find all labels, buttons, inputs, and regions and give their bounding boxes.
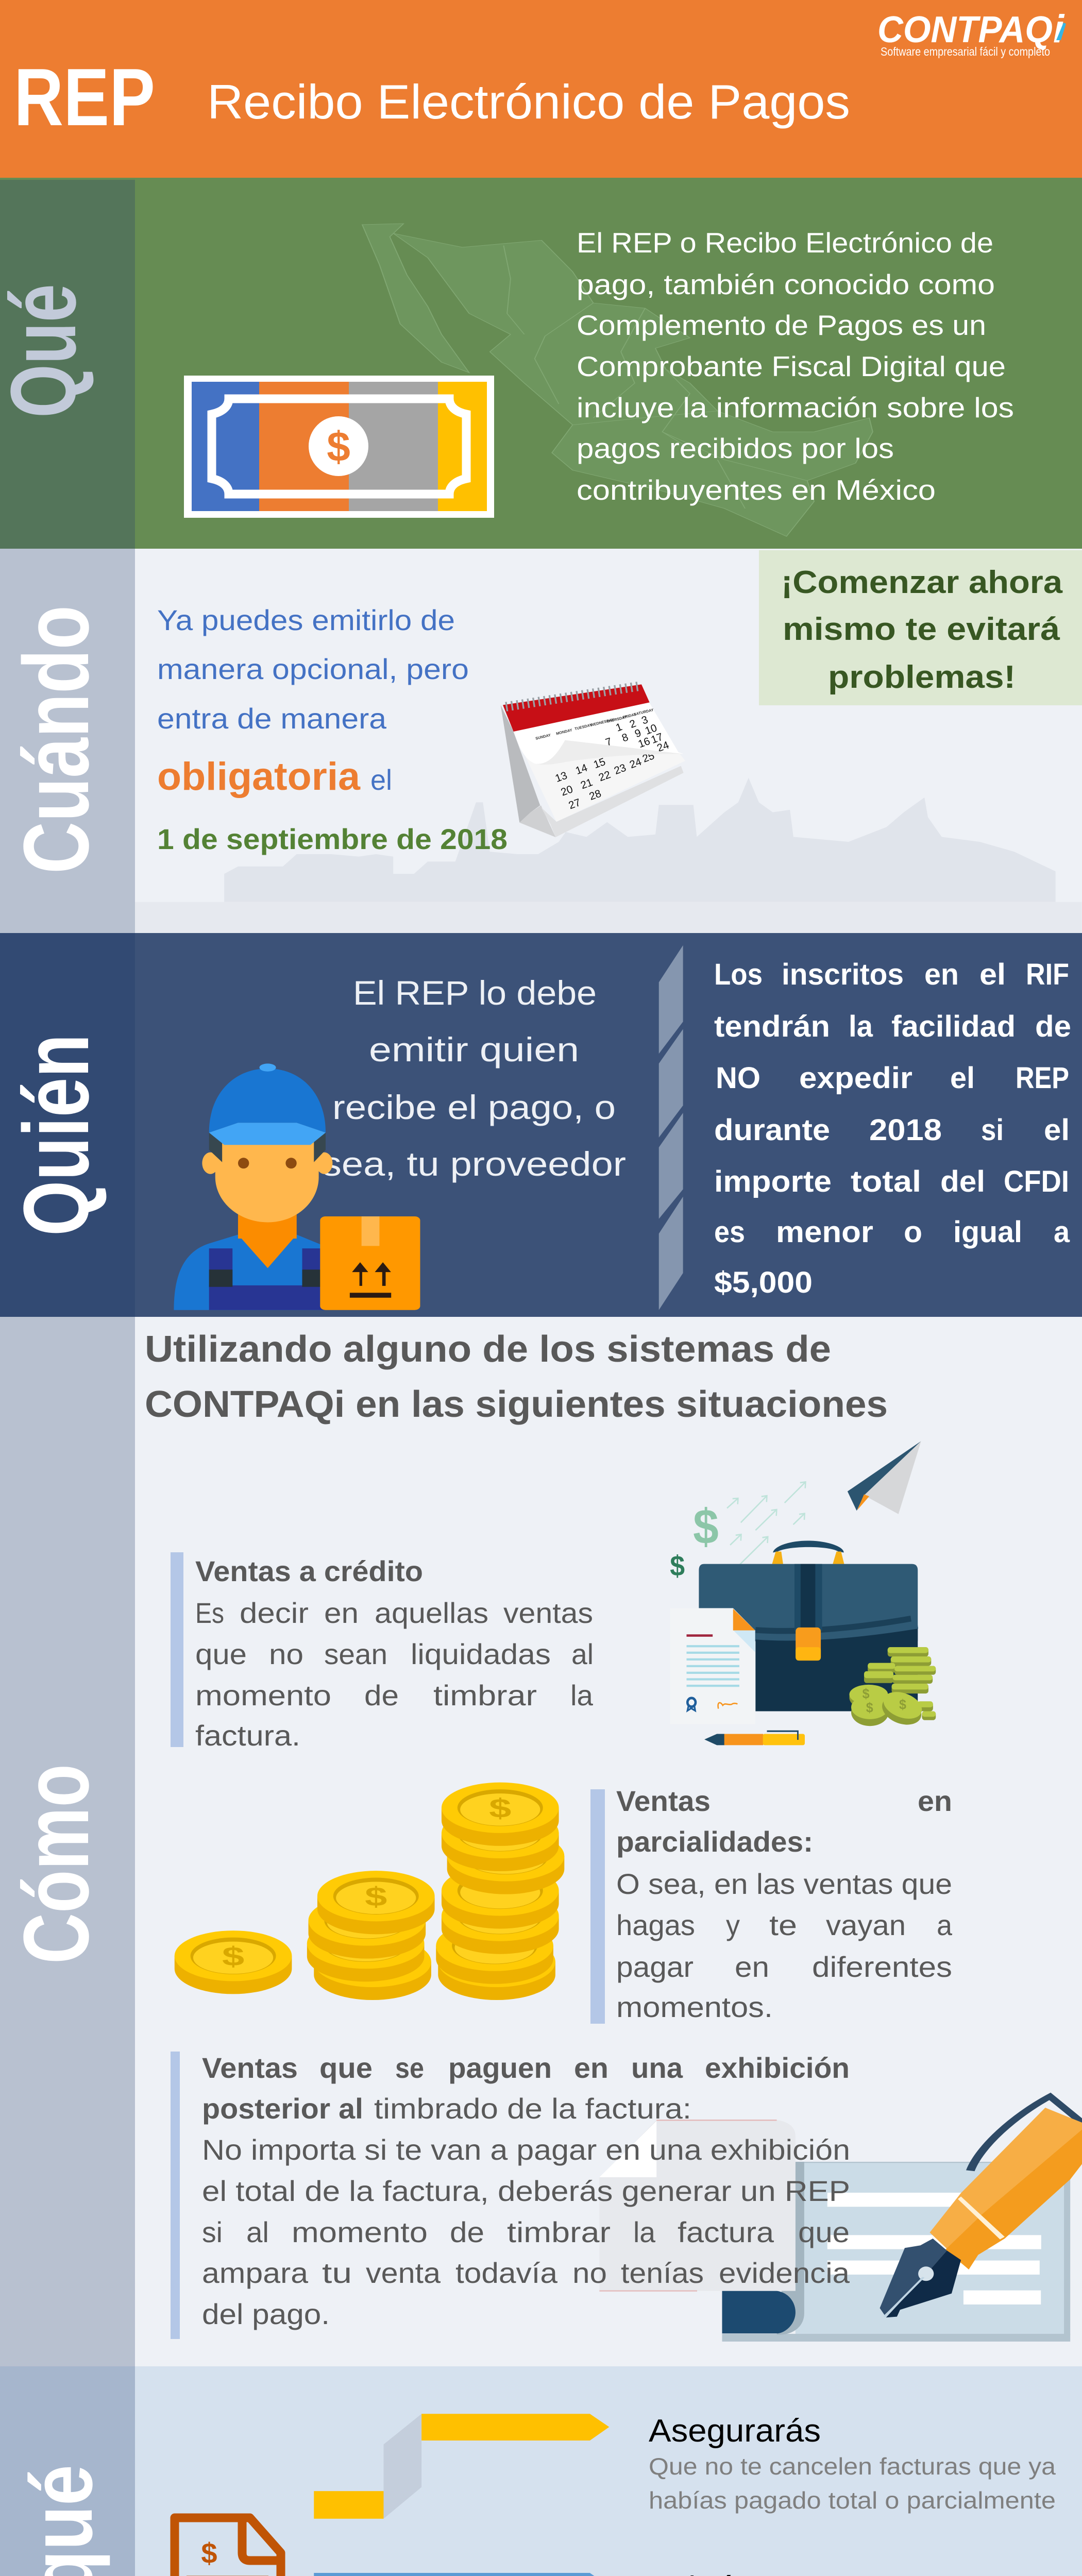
text: definition: contribuyentes en México bbox=[577, 474, 936, 506]
text block: exhibición posterior: ampara bbox=[202, 2257, 309, 2289]
text block: exhibición posterior: todavía bbox=[455, 2257, 558, 2289]
icon: coin stacks bbox=[175, 1783, 564, 2000]
text: who bbox=[322, 974, 626, 1183]
text block: exhibición posterior: Ventas bbox=[202, 2052, 298, 2084]
text: definition: incluye la información sobre los bbox=[577, 392, 1014, 423]
icon: briefcase: $ bbox=[863, 1687, 870, 1702]
text block: ventas en parcialidades bbox=[590, 1785, 953, 2024]
text: definition: pagos recibidos por los bbox=[577, 432, 894, 464]
icon: banknote bbox=[184, 376, 494, 518]
text: asegurarás: Asegurarás bbox=[649, 2413, 821, 2449]
text block: exhibición posterior: posterior al bbox=[202, 2092, 363, 2125]
icon: calendar: 15 bbox=[592, 756, 607, 771]
text: when: obligatoria bbox=[157, 755, 361, 799]
icon: banknote: $ bbox=[327, 423, 350, 470]
text block: ventas en parcialidades: vayan bbox=[826, 1909, 906, 1941]
text: who: emitir quien bbox=[369, 1030, 579, 1069]
heading: CONTPAQi en las siguientes situaciones bbox=[145, 1384, 888, 1425]
text: when bbox=[157, 604, 508, 855]
panel: para qué bbox=[0, 2366, 1082, 2576]
text: RIF note: el bbox=[979, 958, 1006, 991]
icon: calendar bbox=[501, 684, 685, 837]
icon: calendar: 22 bbox=[597, 769, 612, 784]
icon: briefcase: $ bbox=[899, 1698, 906, 1713]
text block: ventas a crédito: Es bbox=[195, 1597, 224, 1629]
text: RIF note: en bbox=[924, 958, 959, 991]
callout: ¡Comenzar ahora bbox=[781, 565, 1063, 600]
arrow: blue bbox=[314, 2573, 609, 2576]
text block: exhibición posterior: venta bbox=[366, 2257, 441, 2289]
text: when: entra de manera bbox=[157, 702, 387, 735]
text: who: recibe el pago, o bbox=[332, 1088, 616, 1126]
sidebar: para qué bbox=[0, 2366, 135, 2576]
panel: cuándo bbox=[0, 549, 1082, 933]
panel: qué bbox=[0, 178, 1082, 549]
icon: coin stacks: $ bbox=[489, 1793, 511, 1823]
text block: ventas a crédito: ventas bbox=[503, 1597, 593, 1629]
text block: ventas en parcialidades: O sea, en las ventas que bbox=[616, 1868, 952, 1900]
text: asegurarás bbox=[649, 2413, 1056, 2514]
sidebar: cómo: Cómo bbox=[5, 1764, 108, 1964]
icon: calendar: 13 bbox=[553, 770, 569, 785]
text block: exhibición posterior: una bbox=[631, 2052, 683, 2084]
text: RIF note: de bbox=[1035, 1010, 1071, 1043]
text block: exhibición posterior: tu bbox=[322, 2257, 352, 2289]
panel: header bbox=[0, 0, 1082, 178]
text block: ventas en parcialidades: momentos. bbox=[616, 1991, 773, 2023]
text block: exhibición posterior: en bbox=[574, 2052, 608, 2084]
text block: ventas a crédito: en bbox=[324, 1597, 359, 1629]
icon: calendar: 27 bbox=[567, 796, 582, 811]
text block: exhibición posterior: momento bbox=[292, 2216, 428, 2248]
icon: calendar: 25 bbox=[641, 750, 656, 765]
icon: calendar: WEDNESDAY bbox=[590, 717, 615, 727]
text block: ventas a crédito: de bbox=[364, 1679, 399, 1711]
icon: calendar: SUNDAY bbox=[535, 733, 551, 741]
text block: ventas en parcialidades: Ventas bbox=[616, 1785, 711, 1817]
text block: exhibición posterior: factura bbox=[678, 2216, 774, 2248]
text: who: sea, tu proveedor bbox=[322, 1145, 626, 1183]
text block: ventas en parcialidades: pagar bbox=[616, 1951, 694, 1983]
text: when: 1 de septiembre de 2018 bbox=[157, 823, 508, 855]
sidebar: cómo bbox=[0, 1317, 135, 2366]
text: definition bbox=[577, 227, 1014, 506]
sidebar: quién: Quién bbox=[5, 1034, 108, 1236]
icon: calendar: 24 bbox=[628, 756, 643, 771]
text: RIF note: $5,000 bbox=[714, 1266, 813, 1299]
text block: exhibición posterior: el total de la factura, deberás generar un REP bbox=[202, 2175, 850, 2207]
logo: CONTPAQi: CONTPAQ bbox=[877, 9, 1053, 50]
icon: CFDI document: $ bbox=[201, 2537, 217, 2569]
text block: ventas a crédito: no bbox=[269, 1638, 303, 1670]
text block: exhibición posterior: evidencia bbox=[719, 2257, 850, 2289]
text block: exhibición posterior: tenías bbox=[621, 2257, 704, 2289]
text: definition: El REP o Recibo Electrónico de bbox=[577, 227, 993, 259]
text block: exhibición posterior: No importa si te van a pagar en una exhibición bbox=[202, 2133, 850, 2166]
text: RIF note: si bbox=[981, 1113, 1004, 1147]
text block: exhibición posterior bbox=[171, 2052, 850, 2339]
icon: document and fountain pen bbox=[599, 2096, 1082, 2342]
text: RIF note: total bbox=[851, 1165, 921, 1198]
text block: ventas a crédito: timbrar bbox=[433, 1679, 537, 1711]
icon: calendar: 16 bbox=[636, 735, 652, 750]
text: RIF note bbox=[714, 958, 1071, 1299]
panel: quién bbox=[0, 933, 1082, 1317]
callout: mismo te evitará bbox=[783, 612, 1060, 647]
icon: calendar: THURSDAY bbox=[606, 715, 628, 724]
logo: CONTPAQi: i bbox=[1053, 7, 1065, 51]
icon: calendar: FRIDAY bbox=[622, 712, 637, 720]
text: RIF note: es bbox=[714, 1215, 745, 1249]
text: when: Ya puedes emitirlo de bbox=[157, 604, 455, 636]
icon: calendar: 23 bbox=[613, 762, 628, 777]
text: RIF note: facilidad bbox=[891, 1010, 1016, 1043]
icon: CFDI document bbox=[175, 2518, 282, 2576]
icon: calendar: 1 bbox=[614, 721, 624, 734]
text: RIF note: expedir bbox=[799, 1061, 912, 1095]
text: definition: Comprobante Fiscal Digital que bbox=[577, 350, 1006, 382]
text: when: manera opcional, pero bbox=[157, 653, 469, 685]
subtitle: Recibo Electrónico de Pagos bbox=[207, 75, 850, 129]
icon: coin stacks: $ bbox=[222, 1941, 244, 1971]
text block: ventas a crédito: Ventas a crédito bbox=[195, 1555, 423, 1587]
text block: ventas a crédito: liquidadas bbox=[411, 1638, 551, 1670]
text block: exhibición posterior: timbrado de la factura: bbox=[374, 2092, 691, 2125]
text block: ventas en parcialidades: en bbox=[735, 1951, 769, 1983]
text: RIF note: RIF bbox=[1026, 958, 1069, 991]
icon: calendar: SATURDAY bbox=[633, 707, 654, 717]
icon: calendar: 20 bbox=[559, 783, 574, 799]
sidebar: cuándo bbox=[0, 549, 135, 933]
text: RIF note: del bbox=[940, 1165, 985, 1198]
heading: Utilizando alguno de los sistemas de bbox=[145, 1329, 831, 1370]
text: definition: Complemento de Pagos es un bbox=[577, 309, 986, 341]
icon: calendar: 7 bbox=[604, 735, 614, 749]
sidebar: quién bbox=[0, 933, 135, 1317]
text: RIF note: a bbox=[1054, 1215, 1070, 1249]
text block: ventas en parcialidades: y bbox=[726, 1909, 740, 1941]
icon: briefcase bbox=[670, 1441, 936, 1745]
callout bbox=[759, 550, 1082, 705]
icon: briefcase: $ bbox=[866, 1701, 873, 1716]
text: RIF note: 2018 bbox=[869, 1113, 942, 1147]
text: RIF note: importe bbox=[714, 1165, 832, 1198]
icon: calendar: 8 bbox=[620, 731, 630, 744]
icon: calendar: TUESDAY bbox=[574, 722, 593, 731]
text: RIF note: CFDI bbox=[1004, 1165, 1069, 1198]
title: REP: REP bbox=[14, 52, 155, 143]
heading bbox=[145, 1329, 888, 1425]
text block: exhibición posterior: paguen bbox=[448, 2052, 552, 2084]
text block: exhibición posterior: de bbox=[450, 2216, 484, 2248]
text block: ventas a crédito: al bbox=[571, 1638, 594, 1670]
icon: calendar: 17 bbox=[649, 731, 665, 746]
icon: calendar: MONDAY bbox=[555, 727, 573, 736]
skyline bbox=[124, 778, 1082, 933]
map of Mexico bbox=[362, 224, 873, 536]
icon: briefcase: $ bbox=[670, 1550, 685, 1582]
text block: ventas a crédito: aquellas bbox=[375, 1597, 488, 1629]
text block: exhibición posterior: que bbox=[319, 2052, 373, 2084]
text: definition: pago, también conocido como bbox=[577, 268, 995, 300]
text: who: El REP lo debe bbox=[353, 974, 597, 1012]
text block: ventas a crédito: factura. bbox=[195, 1719, 300, 1752]
text block: ventas en parcialidades: hagas bbox=[616, 1909, 695, 1941]
text block: ventas en parcialidades: en bbox=[918, 1785, 952, 1817]
text: RIF note: NO bbox=[716, 1061, 760, 1095]
text: RIF note: el bbox=[1044, 1113, 1070, 1147]
text block: exhibición posterior: que bbox=[798, 2216, 850, 2248]
text block: ventas a crédito: que bbox=[195, 1638, 247, 1670]
text block: ventas a crédito: la bbox=[570, 1679, 594, 1711]
callout: problemas! bbox=[828, 659, 1016, 695]
icon: delivery worker bbox=[174, 1063, 420, 1310]
text: asegurarás: habías pagado total o parcialmente bbox=[649, 2487, 1056, 2514]
text: RIF note: o bbox=[904, 1215, 922, 1249]
text block: exhibición posterior: no bbox=[572, 2257, 607, 2289]
text block: ventas en parcialidades: te bbox=[769, 1909, 797, 1941]
panel: cómo bbox=[0, 1317, 1082, 2366]
text block: ventas en parcialidades: diferentes bbox=[812, 1951, 952, 1983]
icon: briefcase: $ bbox=[693, 1499, 719, 1554]
sidebar: qué bbox=[0, 180, 135, 549]
text: RIF note: tendrán bbox=[714, 1010, 830, 1043]
divider: parallelogram bars bbox=[659, 945, 683, 1310]
text: RIF note: el bbox=[950, 1061, 975, 1095]
text block: exhibición posterior: si bbox=[202, 2216, 223, 2248]
text: RIF note: igual bbox=[953, 1215, 1022, 1249]
text: RIF note: REP bbox=[1016, 1061, 1069, 1095]
text: RIF note: la bbox=[849, 1010, 873, 1043]
text: RIF note: durante bbox=[714, 1113, 830, 1147]
logo: CONTPAQi: Software empresarial fácil y completo bbox=[881, 45, 1050, 58]
icon: coin stacks: $ bbox=[365, 1882, 387, 1911]
text block: exhibición posterior: timbrar bbox=[507, 2216, 611, 2248]
icon: calendar: 3 bbox=[640, 714, 650, 727]
icon: calendar: 10 bbox=[644, 722, 658, 737]
text block: exhibición posterior: la bbox=[633, 2216, 656, 2248]
text block: ventas a crédito bbox=[171, 1552, 594, 1752]
text: when: el bbox=[370, 764, 392, 796]
text: RIF note: menor bbox=[776, 1215, 873, 1249]
text: asegurarás: Que no te cancelen facturas que ya bbox=[649, 2453, 1056, 2480]
text block: ventas a crédito: sean bbox=[324, 1638, 387, 1670]
icon: calendar: 9 bbox=[633, 727, 643, 740]
text block: ventas a crédito: momento bbox=[195, 1679, 331, 1711]
text block: ventas en parcialidades: a bbox=[937, 1909, 953, 1941]
icon: calendar: 21 bbox=[579, 776, 594, 791]
text block: exhibición posterior: exhibición bbox=[705, 2052, 850, 2084]
text: RIF note: inscritos bbox=[782, 958, 904, 991]
sidebar: cuándo: Cuándo bbox=[5, 605, 108, 874]
icon: calendar: 14 bbox=[574, 762, 589, 777]
arrow: yellow bbox=[314, 2414, 609, 2519]
icon: calendar: 2 bbox=[628, 717, 637, 731]
text block: exhibición posterior: al bbox=[246, 2216, 269, 2248]
text block: ventas a crédito: decir bbox=[240, 1597, 309, 1629]
text block: exhibición posterior: del pago. bbox=[202, 2298, 330, 2330]
text: RIF note: Los bbox=[714, 958, 763, 991]
text block: exhibición posterior: se bbox=[395, 2052, 424, 2084]
text block: ventas en parcialidades: parcialidades: bbox=[616, 1825, 813, 1858]
icon: calendar: 24 bbox=[655, 739, 671, 754]
icon: calendar: 28 bbox=[587, 788, 603, 803]
